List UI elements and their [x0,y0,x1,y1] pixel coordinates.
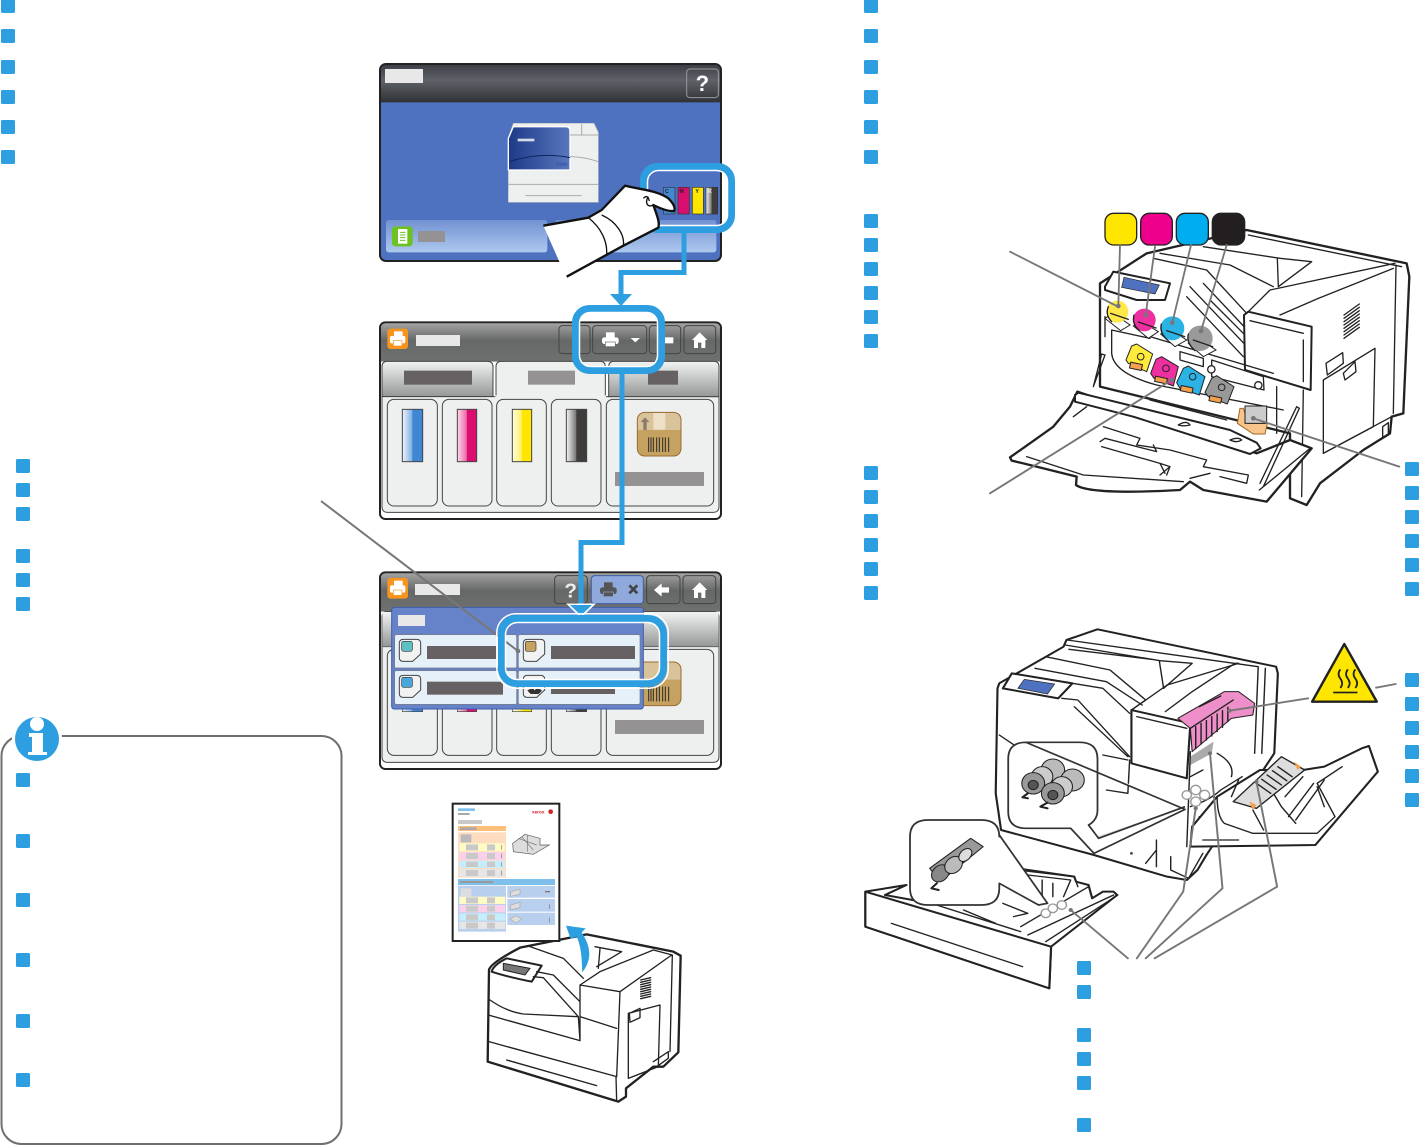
printer thumbnail [508,123,598,202]
side door [1190,746,1378,847]
header bar [381,573,720,612]
list: top left step bullets [1,0,15,164]
tab: right [609,361,719,397]
label placeholder [385,69,423,83]
highlight: printer button [576,308,662,370]
status bar: left [386,220,547,252]
list: drum label bullets [864,466,878,600]
list: middle left step bullets [16,459,30,611]
icon: job list [392,226,413,246]
illustration: printer with front door open [990,213,1409,505]
icon: hot surface warning [1312,644,1377,702]
icon: information [12,714,62,764]
leader line: menu item [321,501,520,653]
toner levels indicator: K [708,189,712,195]
panel: touch screen supplies [380,322,721,519]
list: bottom bullets [1077,961,1091,1132]
header bar [381,65,720,102]
menu item: information [395,635,517,668]
menu item: supplies [518,635,640,668]
header buttons [559,326,716,354]
control panel [1003,673,1072,698]
feed rollers small [1182,785,1210,806]
report page [453,804,559,941]
drum cartridges [1126,344,1234,404]
content area [382,397,719,512]
icon: printer orange [387,578,408,599]
list: toner label bullets [864,214,878,348]
control panel [1105,272,1170,300]
toner color swatches [1105,213,1245,245]
header buttons [555,576,716,604]
panel: note box [2,714,342,1144]
status bar: right [555,220,716,252]
printer body [488,934,681,1102]
label placeholder [415,584,460,595]
arrow: step one to step two [610,233,684,306]
printer body [1100,230,1409,505]
interior paper path [1146,753,1249,878]
list: upper right step bullets [864,0,878,164]
card: cyan toner [387,399,437,506]
panel: touch screen home [380,64,721,261]
waste cartridge [1237,406,1267,434]
help button [687,69,718,98]
help button: ? [696,71,709,96]
toner cartridges [1105,301,1216,357]
leader lines [990,245,1399,493]
toner levels indicator: C [665,189,669,195]
tab: center [495,361,606,398]
panel: touch screen menu [380,572,721,769]
front door [1010,354,1312,502]
header buttons: ? [564,579,577,602]
illustration: printer with report page [453,804,681,1102]
arrow: page output [566,926,589,972]
toner levels indicator: Y [695,189,699,195]
highlight: supplies menu item [497,614,668,688]
label placeholder [418,231,445,242]
illustration: printer with side door and tray open [865,629,1396,988]
gray slot [1190,742,1214,765]
leader lines [1069,684,1396,958]
background cards [387,649,714,755]
callout: rollers [1008,742,1185,853]
content area [382,612,719,762]
menu item: reports [395,671,517,704]
label placeholder [416,335,460,346]
fuser [1178,692,1255,752]
list: note bullets [16,773,30,1087]
card: magenta toner [442,399,492,506]
card: yellow toner [497,399,546,506]
highlight: toner indicator [644,166,732,230]
arrow: step two to step three [566,374,622,618]
printer body [996,629,1278,880]
toner levels indicator: M [679,189,684,195]
icon: printer orange [387,329,408,349]
header bar [381,323,720,362]
card: other supplies [606,399,714,506]
list: waste cartridge bullets [1405,462,1419,596]
card: black toner [551,399,601,506]
tab: left [382,361,493,397]
popup menu [392,607,643,709]
menu item: tools [518,671,640,704]
transfer unit [1233,757,1305,810]
report page: xerox [532,809,545,814]
icon: hand pointing [543,186,675,277]
list: hot surface bullets [1405,673,1419,807]
toner levels indicator [663,187,718,214]
callout: tray roller [910,820,1047,905]
paper tray [865,858,1118,988]
